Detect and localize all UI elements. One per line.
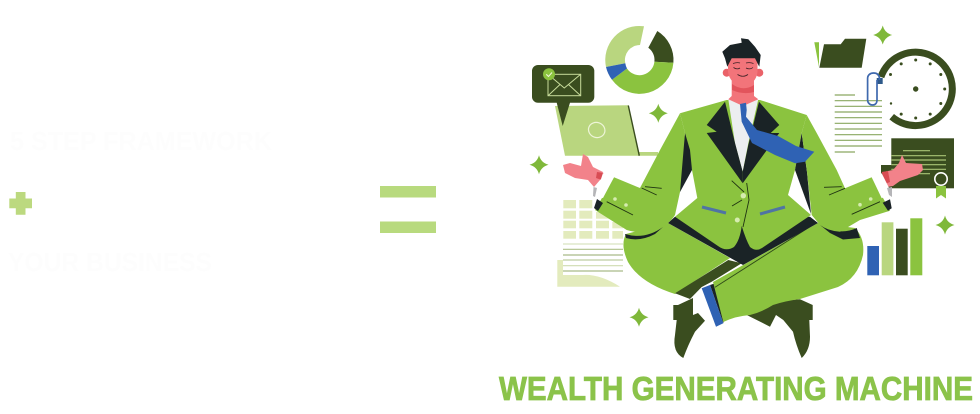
right side shadow (795, 133, 811, 214)
blue sock (702, 283, 724, 327)
icon: equals sign (380, 186, 436, 233)
heading: 5 step framework (near-white): 5 STEP FRAMEWORK (10, 126, 272, 156)
right arm crescent shadow (820, 225, 860, 240)
shirt (728, 99, 758, 172)
right hand (872, 155, 923, 211)
illustration: meditating businessman (563, 38, 923, 358)
icon: folder (814, 39, 866, 68)
left arm (595, 113, 685, 233)
icon: plus sign (9, 192, 32, 215)
icon: document with paperclip (835, 73, 883, 152)
icon: email speech bubble (532, 65, 594, 126)
trouser crease (715, 227, 810, 287)
icon: sparkle 3 (873, 26, 892, 44)
left lapel (707, 102, 743, 183)
left arm crescent shadow (625, 227, 663, 239)
black waist band (668, 217, 818, 265)
neck shadow (732, 84, 754, 93)
tie (740, 103, 814, 163)
head (722, 38, 763, 87)
right shoe (747, 299, 813, 358)
left hand (563, 154, 614, 211)
icon: laptop (555, 105, 658, 156)
neck (728, 80, 758, 106)
right lapel (743, 102, 779, 183)
jacket details (607, 181, 880, 227)
icon: sparkle 5 (630, 308, 648, 327)
heading: your business (near-white): YOUR BUSINESS (8, 247, 212, 277)
icon: spreadsheet (557, 200, 623, 287)
icon: certificate (881, 138, 954, 198)
right arm (802, 115, 890, 232)
bar chart (867, 218, 922, 275)
torso jacket (675, 100, 811, 250)
icon: clock (881, 52, 952, 126)
left thigh (623, 223, 730, 294)
icon: sparkle 4 (936, 216, 954, 234)
icon: sparkle 1 (649, 104, 668, 123)
left shoe (673, 298, 705, 358)
icon: sparkle 2 (530, 155, 548, 174)
dark shin (675, 260, 742, 299)
left side shadow (680, 133, 692, 192)
icon: donut chart (605, 26, 674, 94)
right thigh (713, 223, 863, 322)
